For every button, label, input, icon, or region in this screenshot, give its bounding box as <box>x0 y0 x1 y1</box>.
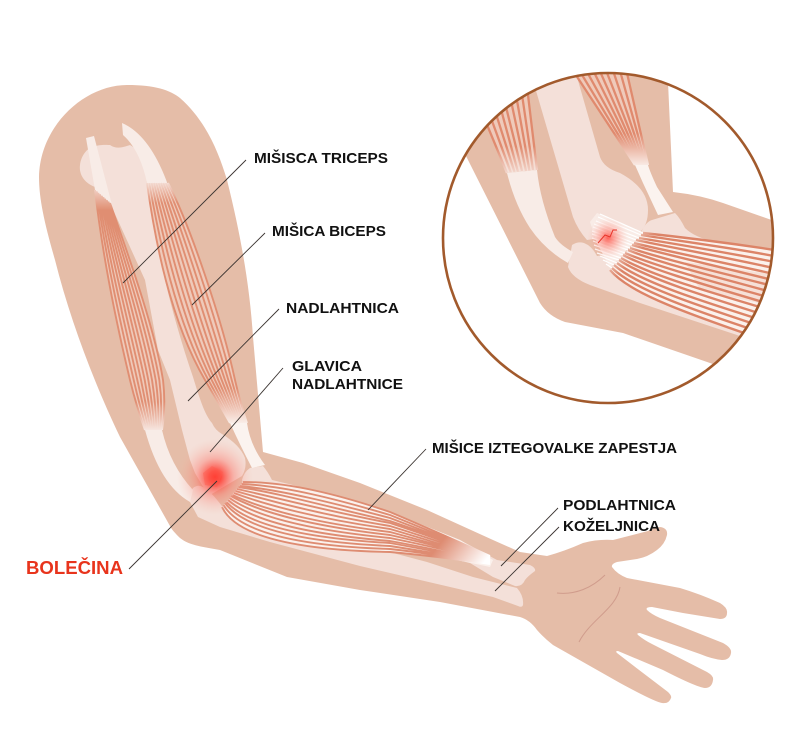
label: head of humerus <box>292 358 403 393</box>
muscle: biceps <box>122 123 265 468</box>
muscle: triceps <box>86 136 193 502</box>
label: biceps: MIŠICA BICEPS <box>272 222 386 240</box>
inset damaged patch <box>590 213 643 268</box>
label: head of humerus: GLAVICA <box>292 358 362 375</box>
detail inset: elbow close-up <box>442 72 774 404</box>
palm lines <box>557 575 620 642</box>
label: humerus: NADLAHTNICA <box>286 300 399 317</box>
inset circle border <box>443 73 773 403</box>
arm and hand silhouette <box>39 85 731 703</box>
pain glow <box>177 439 253 515</box>
inset triceps <box>487 94 573 263</box>
tendon: triceps lower <box>145 430 193 502</box>
inset ulna <box>568 242 741 336</box>
inset skin <box>466 76 772 364</box>
muscle: wrist extensors <box>222 482 493 567</box>
bone: humerus <box>80 145 246 495</box>
tendon: biceps lower <box>230 423 265 468</box>
label: triceps: MIŠISCA TRICEPS <box>254 149 388 167</box>
illustration: arm anatomy <box>27 72 774 704</box>
inset pain glow <box>591 220 626 256</box>
main arm <box>39 85 731 703</box>
label: radius: KOŽELJNICA <box>563 517 660 535</box>
label: head of humerus: NADLAHTNICE <box>292 376 403 393</box>
inset radius head <box>640 213 704 239</box>
leader lines <box>123 160 559 591</box>
label: pain: BOLEČINA <box>26 557 123 578</box>
inset extensor muscle <box>592 214 772 334</box>
label: ulna: PODLAHTNICA <box>563 497 676 514</box>
inset humerus <box>536 78 648 240</box>
inset biceps <box>576 74 673 215</box>
label: wrist extensors: MIŠICE IZTEGOVALKE ZAPESTJA <box>432 439 677 457</box>
bone: ulna <box>190 486 523 607</box>
inset pain zigzag <box>598 230 617 243</box>
bone: radius <box>242 466 535 586</box>
